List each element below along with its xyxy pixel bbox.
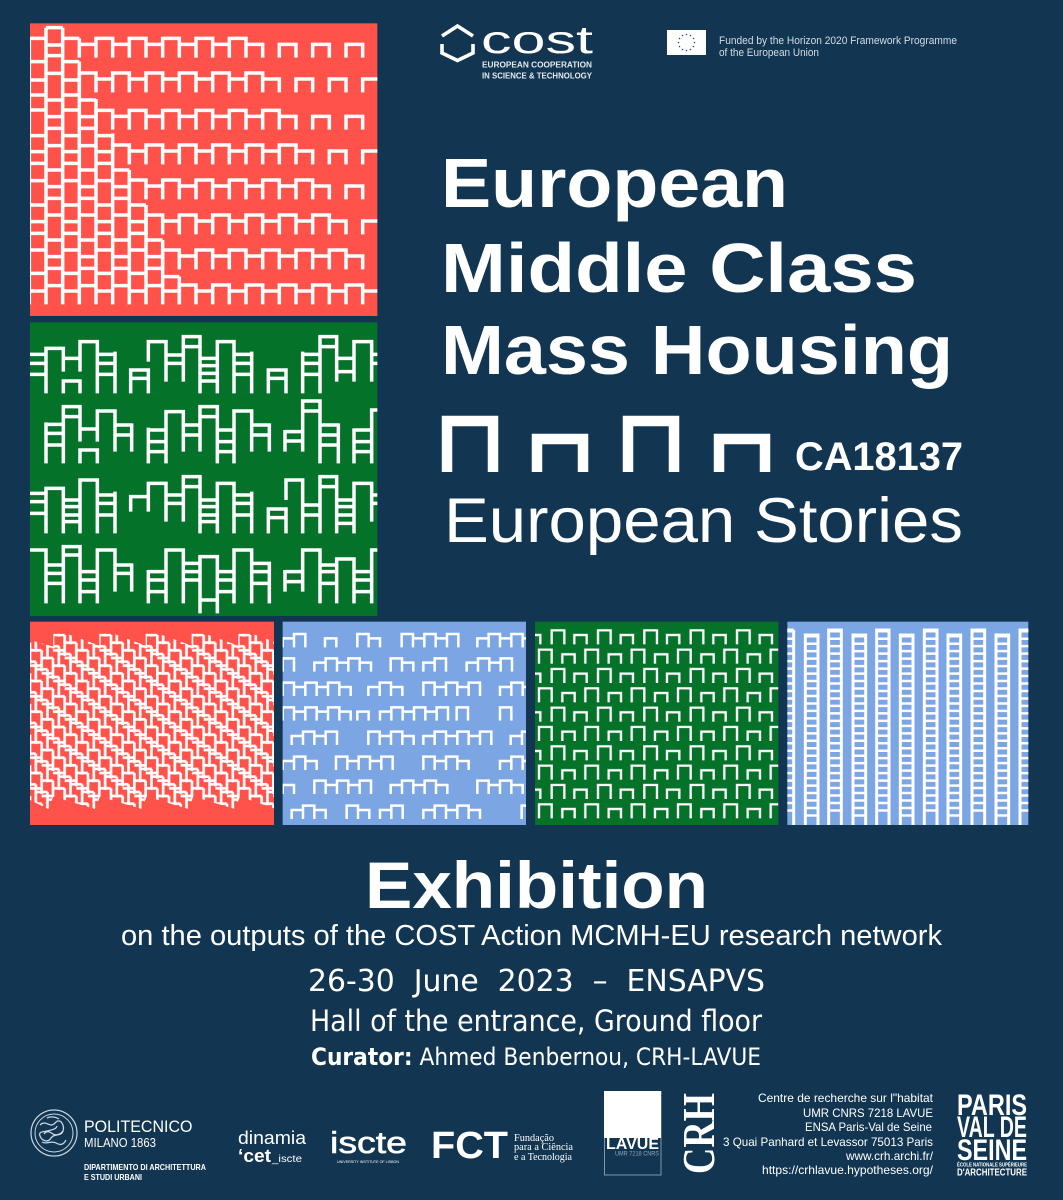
action code: CA18137: [795, 435, 963, 479]
group: four small pattern panels: [30, 622, 534, 825]
icon: Politecnico seal: [31, 1110, 77, 1156]
curator: Curator: Ahmed Benbernou, CRH-LAVUE: [311, 1043, 761, 1071]
location: Hall of the entrance, Ground floor: [310, 1004, 762, 1038]
logo: Paris Val de Seine: D'ARCHITECTURE: [957, 1168, 1027, 1178]
address block: 3 Quai Panhard et Levassor 75013 Paris: [723, 1135, 933, 1149]
exhibition heading: Exhibition: [365, 848, 708, 922]
COST wordmark: cost: [481, 19, 593, 62]
address block: https://crhlavue.hypotheses.org/: [762, 1163, 934, 1177]
logo: Paris Val de Seine: SEINE: [957, 1134, 1027, 1167]
logo: dinamia cet: ‘cet: [238, 1146, 271, 1166]
logo: dinamia cet: [238, 1128, 307, 1166]
logo: dinamia cet: dinamia: [238, 1128, 307, 1148]
COST tagline line 2: IN SCIENCE & TECHNOLOGY: [482, 70, 592, 80]
logo: Paris Val de Seine: ÉCOLE NATIONALE SUPÉRIEURE: [957, 1160, 1027, 1168]
logo: COST: [442, 19, 593, 80]
department line 1: DIPARTIMENTO DI ARCHITETTURA: [84, 1162, 206, 1172]
funding statement: of the European Union: [719, 47, 819, 59]
title: Mass Housing: [441, 311, 953, 389]
title: [441, 144, 953, 389]
logo: Paris Val de Seine: PARIS: [957, 1089, 1027, 1122]
logo: LAVUE: [604, 1091, 661, 1175]
funding statement: Funded by the Horizon 2020 Framework Programme: [719, 35, 957, 47]
icon: COST hexagon: [442, 26, 473, 60]
logo: LAVUE: LAVUE: [606, 1136, 659, 1153]
logo: Paris Val de Seine: VAL DE: [957, 1111, 1027, 1144]
COST tagline line 1: EUROPEAN COOPERATION: [482, 60, 592, 70]
exhibition description: on the outputs of the COST Action MCMH-EU research network: [121, 920, 942, 952]
logo: FCT: e a Tecnologia: [514, 1151, 572, 1163]
logo: CRH: CRH: [673, 1093, 724, 1174]
logo: iscte: iscte: [330, 1125, 407, 1160]
address block: UMR CNRS 7218 LAVUE: [803, 1106, 933, 1120]
panel: green alternating arches pattern: [535, 622, 778, 825]
address block: www.crh.archi.fr/: [845, 1149, 934, 1163]
address block: [723, 1091, 934, 1177]
group: green arches and blue ladders panels: [535, 622, 1032, 825]
logo: FCT: [431, 1125, 573, 1167]
dates and venue: 26-30 June 2023 – ENSAPVS: [308, 964, 765, 999]
logo: dinamia cet: _iscte: [271, 1154, 303, 1165]
address block: Centre de recherche sur l"habitat: [758, 1091, 934, 1105]
Politecnico name: POLITECNICO: [84, 1118, 193, 1136]
funding statement: [719, 35, 957, 59]
logo: FCT: Fundação: [514, 1132, 554, 1144]
title: Middle Class: [441, 229, 917, 307]
logo: FCT: FCT: [431, 1125, 508, 1167]
logo: FCT: para a Ciência: [514, 1141, 573, 1153]
address block: ENSA Paris-Val de Seine: [805, 1120, 932, 1134]
icon: four arches motif: [447, 421, 765, 472]
subtitle: European Stories: [444, 486, 963, 556]
panel: blue ladder towers pattern: [782, 622, 1032, 825]
logo: iscte: UNIVERSITY INSTITUTE OF LISBON: [337, 1160, 399, 1164]
panel: large red housing pattern: [29, 23, 379, 316]
panel: large green skyline pattern: [30, 322, 378, 616]
Milano 1863: MILANO 1863: [84, 1135, 156, 1150]
logo: Paris Val de Seine: [957, 1089, 1027, 1178]
panel: dense red diagonal pattern: [30, 622, 274, 825]
title: European: [441, 144, 788, 222]
panel: sparse blue arches pattern: [283, 622, 534, 825]
department line 2: E STUDI URBANI: [84, 1172, 142, 1182]
icon: EU flag: [667, 30, 706, 55]
logo: LAVUE: UMR 7218 CNRS: [615, 1152, 659, 1158]
logo: Politecnico di Milano: [31, 1110, 206, 1182]
